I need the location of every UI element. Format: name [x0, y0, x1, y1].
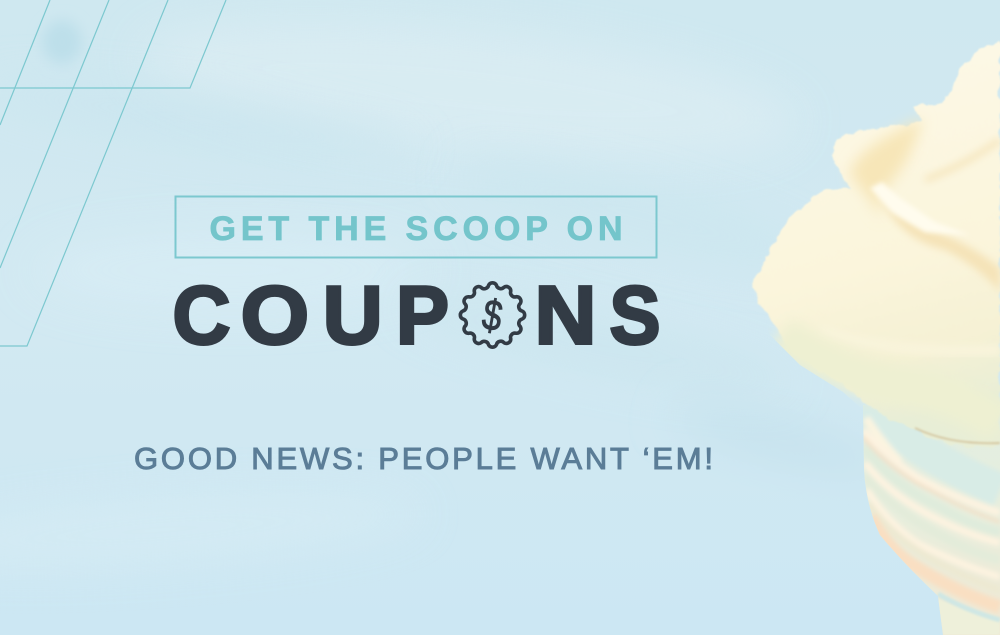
cone: [855, 400, 1000, 635]
heading: get the scoop on: GET THE SCOOP ON: [210, 210, 622, 248]
icon: coupon badge with dollar sign: [457, 279, 528, 351]
icon: coupon badge with dollar sign: $: [479, 291, 506, 341]
title: coupons: [172, 268, 660, 362]
title: coupons: U: [323, 268, 383, 362]
title: coupons: O: [241, 268, 309, 362]
scoop: [753, 40, 1000, 447]
decorative grid lines: [0, 0, 226, 346]
title: coupons: C: [172, 268, 230, 362]
subheading: GOOD NEWS: PEOPLE WANT ‘EM!: [134, 441, 713, 476]
title: coupons: N: [534, 268, 596, 362]
ice cream cone: [753, 40, 1000, 635]
tagline box: [176, 196, 656, 258]
scoop shading: [780, 118, 1000, 443]
title: coupons: S: [610, 268, 660, 362]
title: coupons: P: [396, 268, 449, 362]
